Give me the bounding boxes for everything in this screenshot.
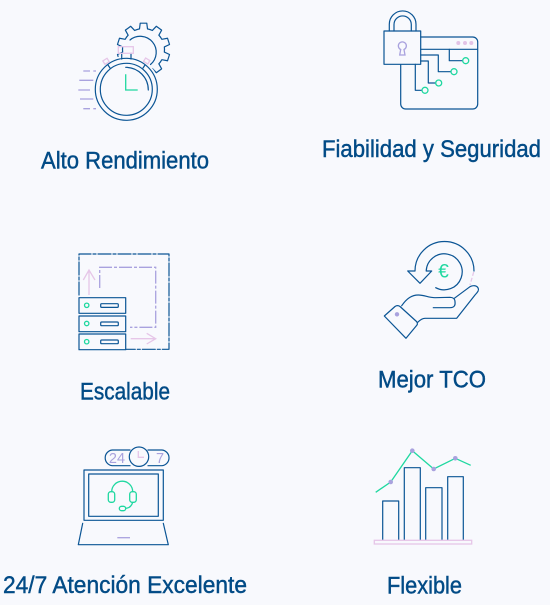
data points bbox=[388, 448, 458, 484]
gear bbox=[116, 23, 171, 76]
stopwatch crown bbox=[118, 47, 133, 53]
base bbox=[374, 540, 472, 544]
24/7 pills bbox=[105, 450, 169, 467]
heading: Escalable bbox=[80, 378, 170, 406]
bars bbox=[383, 468, 463, 540]
headset bbox=[108, 481, 136, 511]
circular arrow bbox=[408, 242, 474, 290]
server stack bbox=[79, 298, 126, 350]
side buttons bbox=[103, 58, 150, 64]
stopwatch body bbox=[93, 53, 160, 123]
laptop bbox=[78, 470, 168, 545]
panel: 24/7 Atención Excelente bbox=[3, 447, 247, 599]
24/7 pills: 24 bbox=[109, 451, 125, 467]
24/7 pills: 7 bbox=[156, 451, 164, 467]
panel: Escalable bbox=[79, 254, 170, 406]
icon: hand with euro cycle bbox=[384, 242, 479, 338]
dashed arrow tail bbox=[470, 272, 474, 285]
icon: bar and line chart bbox=[374, 448, 472, 544]
arrow up bbox=[83, 270, 95, 295]
stopwatch hands bbox=[126, 74, 138, 90]
heading: Mejor TCO bbox=[378, 366, 486, 394]
padlock bbox=[384, 11, 421, 64]
inner dashed frame bbox=[100, 267, 156, 327]
circuit nodes bbox=[422, 58, 469, 93]
cuff bbox=[384, 306, 417, 338]
heading: 24/7 Atención Excelente bbox=[3, 572, 247, 599]
panel: Alto Rendimiento bbox=[41, 23, 209, 175]
speed lines bbox=[78, 71, 96, 109]
panel: Mejor TCO bbox=[378, 242, 486, 394]
icon: padlock and browser window bbox=[384, 11, 478, 109]
clock bbox=[129, 447, 149, 466]
outer dashed frame bbox=[79, 254, 169, 349]
cuff dot bbox=[395, 312, 399, 316]
window bbox=[401, 37, 478, 109]
panel: Flexible bbox=[374, 448, 472, 600]
trend line bbox=[376, 451, 471, 492]
heading: Alto Rendimiento bbox=[41, 148, 209, 174]
panel: Fiabilidad y Seguridad bbox=[322, 11, 541, 163]
window dots bbox=[456, 41, 473, 45]
icon: stopwatch and gear bbox=[78, 23, 171, 123]
icon: scaling servers bbox=[79, 254, 169, 350]
hand bbox=[402, 286, 479, 322]
icon: laptop with headset bbox=[78, 447, 169, 545]
circuit traces bbox=[415, 49, 462, 90]
trackpad bbox=[117, 537, 130, 539]
heading: Flexible bbox=[387, 572, 462, 600]
euro sign: € bbox=[438, 262, 449, 282]
arrow right bbox=[131, 333, 156, 344]
